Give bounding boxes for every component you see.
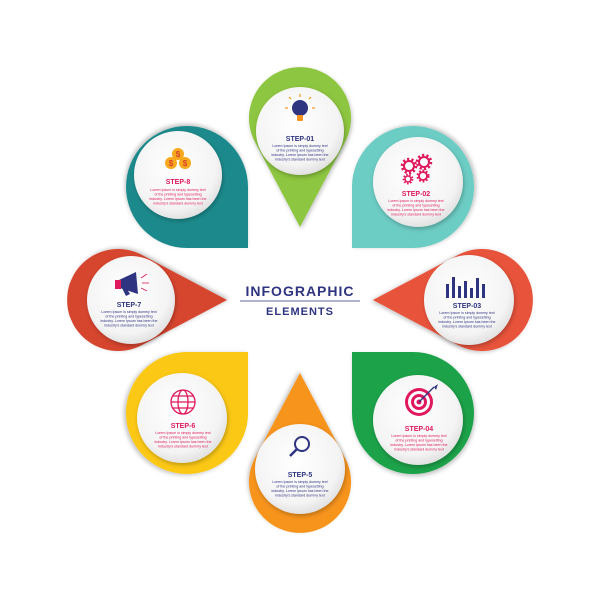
label: step 5: STEP-5 (288, 472, 312, 479)
label: step 03: STEP-03 (453, 303, 481, 310)
icon: coins: $ (169, 159, 174, 168)
label: step 04: STEP-04 (405, 426, 433, 433)
panel: step 3 (373, 249, 533, 351)
panel: step 7: industry. Lorem Ipsum has been the (100, 319, 158, 323)
label: step 8: STEP-8 (166, 179, 190, 186)
label: step 01: STEP-01 (286, 136, 314, 143)
panel: step 3: industry's standard dummy text (442, 324, 492, 328)
icon: light bulb (285, 94, 315, 121)
panel: step 5: industry. Lorem Ipsum has been the (271, 489, 329, 493)
panel: step 2 (352, 126, 474, 248)
panel: step 1: industry's standard dummy text (275, 158, 325, 162)
panel: step 5: of the printing and typesetting (276, 484, 324, 488)
panel: step 3: Lorem Ipsum is simply dummy text (439, 311, 495, 315)
panel: step 1: of the printing and typesetting (276, 148, 324, 152)
panel: step 1: Lorem Ipsum is simply dummy text (272, 144, 328, 148)
icon: target (405, 384, 438, 416)
panel: step 7 (67, 249, 227, 351)
title (240, 283, 360, 318)
panel: step 1: industry. Lorem Ipsum has been the (271, 153, 329, 157)
icon: magnifier (290, 437, 309, 456)
icon: bar chart (446, 277, 485, 298)
label: step 7: STEP-7 (117, 302, 141, 309)
icon: coins: $ (176, 150, 181, 159)
icon: coins (165, 148, 191, 169)
panel: step 6: industry. Lorem Ipsum has been the (154, 440, 212, 444)
panel: step 8: of the printing and typesetting (154, 192, 202, 196)
label: step 02: STEP-02 (402, 191, 430, 198)
panel: step 1 (249, 67, 351, 227)
panel: step 6: industry's standard dummy text (158, 444, 208, 448)
panel: step 8 (126, 126, 248, 248)
panel: step 8: Lorem Ipsum is simply dummy text (150, 188, 206, 192)
panel: step 4 (352, 352, 474, 474)
panel: step 3: of the printing and typesetting (443, 316, 491, 320)
panel: step 4: Lorem Ipsum is simply dummy text (391, 434, 447, 438)
title: INFOGRAPHIC (246, 283, 354, 299)
icon: coins: $ (183, 159, 188, 168)
title: ELEMENTS (266, 306, 334, 318)
panel: step 4: industry's standard dummy text (394, 448, 444, 452)
icon: megaphone (115, 272, 149, 296)
panel: step 5 (249, 373, 351, 533)
label: step 6: STEP-6 (171, 423, 195, 430)
panel: step 8: industry. Lorem Ipsum has been the (149, 197, 207, 201)
panel: step 7: of the printing and typesetting (105, 314, 153, 318)
panel: step 6: of the printing and typesetting (159, 436, 207, 440)
panel: step 4: of the printing and typesetting (395, 438, 443, 442)
panel: step 7: Lorem Ipsum is simply dummy text (101, 310, 157, 314)
panel: step 6 (126, 352, 248, 474)
panel: step 6: Lorem Ipsum is simply dummy text (155, 431, 211, 435)
icon: gears (402, 155, 431, 184)
panel: step 2: industry. Lorem Ipsum has been the (387, 208, 445, 212)
panel: step 2: Lorem Ipsum is simply dummy text (388, 199, 444, 203)
panel: step 4: industry. Lorem Ipsum has been the (390, 443, 448, 447)
icon: globe (171, 390, 195, 414)
panel: step 3: industry. Lorem Ipsum has been the (438, 320, 496, 324)
panel: step 7: industry's standard dummy text (104, 324, 154, 328)
panel: step 5: Lorem Ipsum is simply dummy text (272, 480, 328, 484)
panel: step 2: of the printing and typesetting (392, 204, 440, 208)
panel: step 8: industry's standard dummy text (153, 202, 203, 206)
panel: step 5: industry's standard dummy text (275, 494, 325, 498)
panel: step 2: industry's standard dummy text (391, 212, 441, 216)
